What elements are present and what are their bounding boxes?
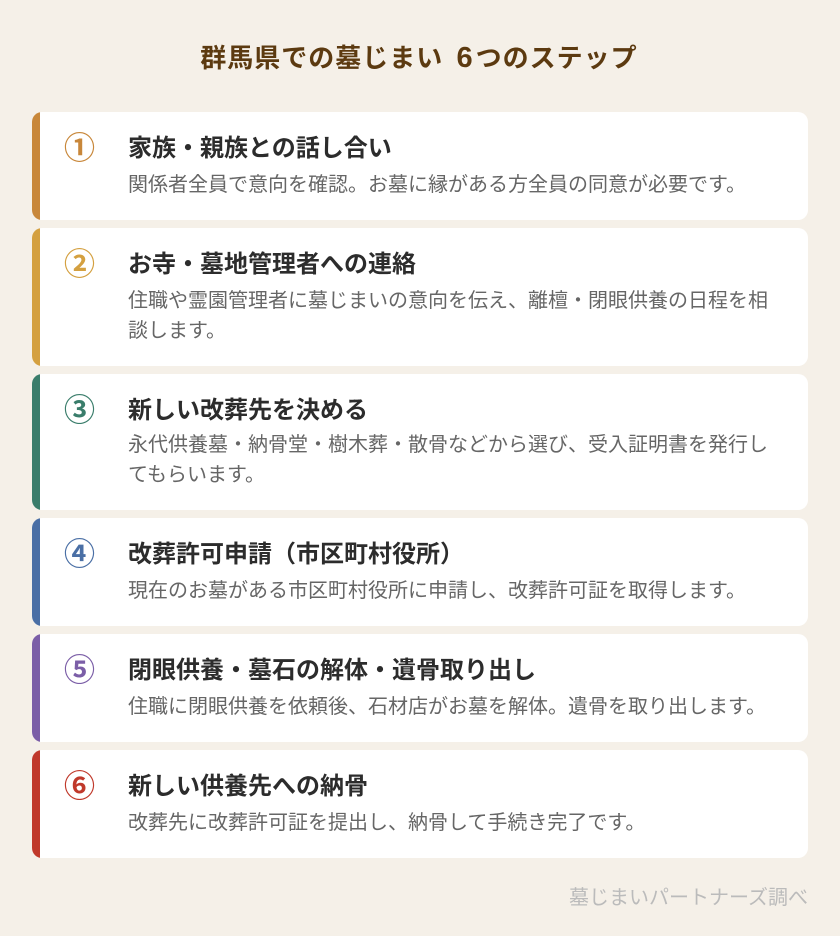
step 4 heading: 改葬許可申請（市区町村役所） xyxy=(128,541,464,568)
step 3 heading: 新しい改葬先を決める xyxy=(128,397,368,424)
step 1 number: ① xyxy=(64,131,95,166)
step 5 description: 住職に閉眼供養を依頼後、石材店がお墓を解体。遺骨を取り出します。 xyxy=(128,696,766,718)
panel: step 2 xyxy=(32,228,808,366)
panel: step 6 xyxy=(32,750,808,858)
panel: step 4 xyxy=(32,518,808,626)
step 1 heading: 家族・親族との話し合い xyxy=(128,135,392,162)
title: 群馬県での墓じまい 6つのステップ xyxy=(200,42,638,74)
step 5 heading: 閉眼供養・墓石の解体・遺骨取り出し xyxy=(128,657,536,684)
step 5 number: ⑤ xyxy=(64,653,95,688)
source note: 墓じまいパートナーズ調べ xyxy=(569,887,808,909)
step 3 description: 永代供養墓・納骨堂・樹木葬・散骨などから選び、受入証明書を発行してもらいます。 xyxy=(128,434,768,486)
step 6 description: 改葬先に改葬許可証を提出し、納骨して手続き完了です。 xyxy=(128,812,645,834)
step 6 number: ⑥ xyxy=(64,769,95,804)
step 2 heading: お寺・墓地管理者への連絡 xyxy=(128,251,416,278)
step 4 description: 現在のお墓がある市区町村役所に申請し、改葬許可証を取得します。 xyxy=(128,580,746,602)
step 4 number: ④ xyxy=(64,537,95,572)
step 6 heading: 新しい供養先への納骨 xyxy=(128,773,368,800)
panel: step 5 xyxy=(32,634,808,742)
step 1 description: 関係者全員で意向を確認。お墓に縁がある方全員の同意が必要です。 xyxy=(128,174,746,196)
step 3 number: ③ xyxy=(64,393,95,428)
step 2 description: 住職や霊園管理者に墓じまいの意向を伝え、離檀・閉眼供養の日程を相談します。 xyxy=(128,290,768,342)
step 2 number: ② xyxy=(64,247,95,282)
panel: step 3 xyxy=(32,374,808,510)
panel: step 1 xyxy=(32,112,808,220)
